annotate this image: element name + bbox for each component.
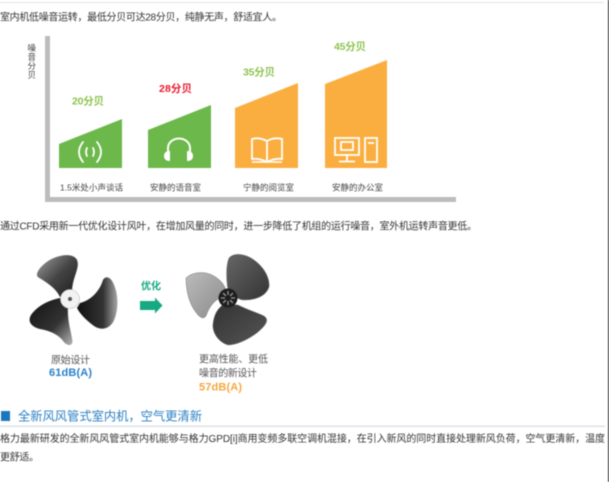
new design caption <box>199 352 268 394</box>
bar: 45 dB <box>325 40 387 192</box>
fan blades <box>186 254 269 345</box>
bar: 20 dB <box>59 94 123 192</box>
value: 45 dB: 45分贝 <box>334 40 366 53</box>
noise level bar chart <box>28 36 456 202</box>
fan blades <box>30 255 117 345</box>
top rule <box>0 2 604 3</box>
bar: 35 dB <box>235 66 298 192</box>
y axis label: 噪 <box>28 43 36 53</box>
bar: 28 dB <box>148 82 211 192</box>
caption: quiet voice room: 安静的语音室 <box>150 182 201 192</box>
caption: quiet office: 安静的办公室 <box>332 182 383 192</box>
optimize label: 优化 <box>141 280 161 292</box>
right edge line <box>608 0 609 482</box>
fan hub <box>60 290 80 308</box>
y axis label: 贝 <box>28 70 36 80</box>
original design caption <box>49 354 92 379</box>
redesigned fan <box>186 254 269 345</box>
caption: quiet reading room: 宁静的阅览室 <box>243 182 294 192</box>
value: 35 dB: 35分贝 <box>243 66 275 78</box>
chart axes <box>45 36 456 202</box>
arrow <box>140 298 162 314</box>
icon: desktop computer <box>335 138 377 162</box>
caption: 1.5 m whisper: 1.5米处小声谈话 <box>60 182 123 192</box>
section heading: 全新风风管式室内机，空气更清新 <box>18 408 202 424</box>
icon: open book <box>252 138 282 162</box>
y axis label <box>28 43 36 80</box>
fresh air body text: 更舒适。 <box>0 450 39 464</box>
fan hub <box>218 288 238 308</box>
heading marker <box>1 411 10 421</box>
original fan <box>30 255 117 345</box>
original design caption: 原始设计 <box>51 354 90 366</box>
icon: sound waves <box>79 142 101 162</box>
new design caption: 更高性能、更低 <box>199 352 268 366</box>
fresh air body text: 格力最新研发的全新风风管式室内机能够与格力GPD[i]商用变频多联空调机混接，在引入新风的同时直接处理新风负荷，空气更清新，温度 <box>0 432 605 445</box>
value: 28 dB: 28分贝 <box>159 82 192 95</box>
y axis label: 分 <box>28 61 36 71</box>
icon: headphones <box>164 138 193 161</box>
intro text: indoor unit noise: 室内机低噪音运转，最低分贝可达28分贝，纯静无声，舒适宜人。 <box>0 10 282 24</box>
value: 20 dB: 20分贝 <box>72 94 104 108</box>
57 dB value: 57dB(A) <box>199 382 242 394</box>
fresh air body text <box>0 432 605 464</box>
new design caption: 噪音的新设计 <box>199 366 257 380</box>
61 dB value: 61dB(A) <box>49 367 92 379</box>
heading rule <box>0 426 605 427</box>
y axis label: 音 <box>28 52 36 62</box>
CFD fan blade text: 通过CFD采用新一代优化设计风叶，在增加风量的同时，进一步降低了机组的运行噪音，室外机运转声音更低。 <box>0 220 477 232</box>
